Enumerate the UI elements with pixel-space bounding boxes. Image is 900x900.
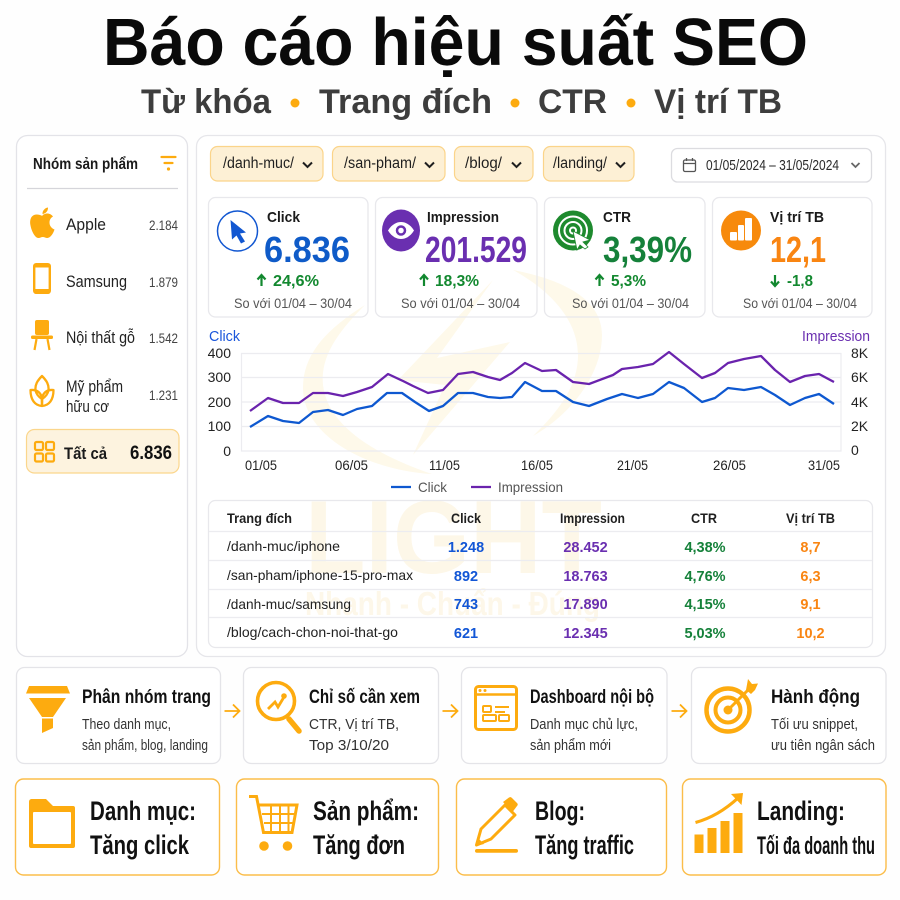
column: page: /san-pham/iphone-15-pro-max	[227, 567, 413, 583]
icon: cursor	[218, 211, 258, 251]
right axis: 4K	[851, 394, 869, 410]
item: total (highlighted): 6.836	[130, 443, 172, 464]
step card: group pages	[16, 668, 220, 764]
column: CTR: 4,15%	[684, 597, 726, 613]
goal card: blog: Blog:	[535, 796, 585, 826]
item: organic cosmetics	[30, 376, 178, 416]
table header: Impression	[560, 510, 625, 526]
column: impression: 18.763	[563, 569, 608, 585]
step card: action: ưu tiên ngân sách	[771, 738, 875, 754]
watermark: LIGHT logo	[303, 270, 602, 622]
step card: group pages: Theo danh mục,	[82, 717, 171, 733]
goal card: category: Tăng click	[90, 830, 190, 860]
right axis: 2K	[851, 418, 869, 434]
item: organic cosmetics: hữu cơ	[66, 398, 109, 416]
title: Báo cáo hiệu suất SEO	[103, 5, 808, 80]
left axis: 0	[223, 443, 231, 459]
KPI card: average position: 12,1	[770, 229, 826, 270]
column: average position: 10,2	[796, 626, 825, 642]
column: click: 621	[454, 626, 478, 642]
icon: eye	[382, 210, 420, 252]
step card: metrics to watch: Chỉ số cần xem	[309, 687, 420, 708]
item: organic cosmetics: Mỹ phẩm	[66, 378, 123, 396]
right axis	[851, 345, 869, 458]
KPI card: Impression: So với 01/04 – 30/04	[401, 296, 520, 311]
watermark: LIGHT logo: Nhanh - Chuẩn - Đúng	[305, 585, 600, 622]
icon: magnifier with trend	[258, 682, 299, 731]
column: click: 892	[454, 569, 478, 585]
goal card: product	[236, 779, 438, 875]
panel: product groups	[16, 136, 188, 656]
left axis: 200	[208, 394, 231, 410]
arrow: step 3 to 4	[672, 704, 686, 718]
item: wood furniture: 1.542	[149, 330, 178, 346]
legend: Impression	[498, 479, 563, 495]
icon: funnel	[26, 686, 70, 733]
icon: calendar	[684, 158, 696, 172]
column: click	[448, 540, 484, 642]
table header: Vị trí TB	[786, 510, 835, 526]
x axis	[245, 458, 840, 473]
goal card: blog: Tăng traffic	[535, 830, 634, 860]
column: page	[227, 538, 413, 640]
table header: Click	[451, 510, 481, 526]
subtitle: metrics: Từ khóa	[141, 83, 272, 121]
KPI card: average position: -1,8	[787, 273, 813, 290]
icon: dashboard window	[476, 686, 516, 730]
left axis: 100	[208, 418, 231, 434]
icon: pencil	[475, 797, 518, 853]
column: average position: 8,7	[800, 540, 821, 556]
column: impression: 28.452	[563, 540, 608, 556]
series: click	[250, 382, 834, 427]
left axis	[208, 345, 231, 459]
column: impression	[563, 540, 608, 642]
table header: Trang đích	[227, 510, 292, 526]
filter chips	[210, 146, 634, 181]
arrow: step 1 to 2	[224, 704, 240, 718]
step card: internal dashboard: Danh mục chủ lực,	[530, 717, 638, 733]
subtitle: metrics: Trang đích	[319, 83, 492, 121]
x axis: 21/05	[617, 458, 648, 473]
KPI card: average position	[712, 198, 872, 317]
icon: target click	[553, 210, 593, 250]
column: page: /blog/cach-chon-noi-that-go	[227, 624, 398, 640]
goal card: product: Tăng đơn	[313, 830, 405, 860]
icon: growth chart	[694, 793, 743, 853]
column: average position	[796, 540, 825, 642]
column: CTR: 4,38%	[684, 540, 726, 556]
step card: group pages: sản phẩm, blog, landing	[82, 738, 208, 754]
column: click: 1.248	[448, 540, 484, 556]
item: organic cosmetics: 1.231	[149, 387, 178, 403]
date range picker	[672, 148, 872, 182]
panel: dashboard	[196, 136, 886, 656]
table header: CTR	[691, 510, 717, 526]
step card: internal dashboard	[462, 668, 667, 764]
KPI card: Impression: 18,3%	[435, 273, 479, 290]
KPI card: Impression	[376, 198, 537, 317]
subtitle: metrics	[141, 83, 782, 121]
KPI card: average position: So với 01/04 – 30/04	[743, 296, 857, 311]
column: page: /danh-muc/samsung	[227, 596, 351, 612]
icon: filter	[162, 157, 176, 171]
x axis: 06/05	[335, 458, 368, 473]
item: total (highlighted)	[26, 430, 179, 473]
item: Samsung	[34, 264, 178, 293]
subtitle: metrics: CTR	[538, 83, 607, 121]
filter chips: /landing/	[553, 155, 608, 172]
step card: metrics to watch: Top 3/10/20	[309, 738, 389, 754]
KPI card: average position: Vị trí TB	[770, 209, 824, 226]
table: landing pages	[208, 500, 872, 648]
step card: action	[692, 668, 886, 764]
filter chips: /blog/	[465, 155, 503, 172]
chart axis title: click: Click	[209, 329, 241, 345]
right axis: 6K	[851, 369, 869, 385]
KPI card: CTR: 5,3%	[611, 273, 646, 290]
column: impression: 12.345	[563, 626, 608, 642]
icon: bars	[721, 210, 761, 250]
left axis: 400	[208, 345, 231, 361]
right axis: 8K	[851, 345, 869, 361]
column: impression: 17.890	[563, 597, 608, 613]
subtitle: metrics: Vị trí TB	[654, 83, 782, 121]
column: page: /danh-muc/iphone	[227, 538, 340, 554]
heading: product groups: Nhóm sản phẩm	[33, 155, 138, 173]
goal card: category	[16, 779, 220, 875]
x axis: 11/05	[429, 458, 460, 473]
goal card: blog	[456, 779, 666, 875]
date range picker: 01/05/2024 – 31/05/2024	[706, 158, 839, 174]
x axis: 31/05	[808, 458, 840, 473]
column: CTR: 4,76%	[684, 569, 726, 585]
KPI card: CTR: 3,39%	[603, 229, 692, 270]
icon: shopping cart	[249, 796, 297, 851]
goal card: landing	[682, 779, 886, 875]
KPI card: Click: 24,6%	[273, 273, 319, 290]
step card: metrics to watch: CTR, Vị trí TB,	[309, 717, 399, 733]
goal card: landing: Landing:	[757, 796, 845, 826]
column: CTR: 5,03%	[684, 626, 726, 642]
column: CTR	[684, 540, 726, 642]
step card: action: Hành động	[771, 687, 860, 708]
item: wood furniture: Nội thất gỗ	[66, 328, 135, 347]
chart axis title: impression: Impression	[802, 329, 870, 345]
KPI card: CTR: So với 01/04 – 30/04	[572, 296, 689, 311]
column: average position: 9,1	[800, 597, 821, 613]
column: click: 743	[454, 597, 478, 613]
x axis: 01/05	[245, 458, 277, 473]
item: Apple: 2.184	[149, 217, 178, 233]
step card: group pages: Phân nhóm trang	[82, 687, 211, 708]
KPI card: Impression: Impression	[427, 209, 499, 226]
series: impression	[250, 352, 834, 411]
goal card: product: Sản phẩm:	[313, 796, 419, 826]
step card: metrics to watch	[244, 668, 438, 764]
KPI card: CTR	[544, 198, 705, 317]
item: total (highlighted): Tất cả	[64, 444, 107, 463]
legend	[391, 479, 563, 495]
KPI card: CTR: CTR	[603, 209, 631, 226]
x axis: 16/05	[521, 458, 553, 473]
line chart: click and impression	[208, 329, 870, 495]
item: Apple: Apple	[66, 216, 106, 234]
icon: folder	[29, 799, 75, 848]
filter chips: /san-pham/	[344, 155, 417, 172]
step card: internal dashboard: Dashboard nội bộ	[530, 687, 654, 708]
legend: Click	[418, 479, 448, 495]
watermark: LIGHT logo: LIGHT	[305, 480, 602, 596]
step card: internal dashboard: sản phẩm mới	[530, 738, 611, 754]
item: wood furniture	[31, 320, 178, 350]
left axis: 300	[208, 369, 231, 385]
goal card: category: Danh mục:	[90, 796, 196, 826]
item: Samsung: Samsung	[66, 273, 127, 291]
KPI card: Click	[208, 198, 368, 317]
column: average position: 6,3	[800, 569, 821, 585]
x axis: 26/05	[713, 458, 746, 473]
arrow: step 2 to 3	[442, 704, 458, 718]
item: Apple	[30, 208, 178, 238]
KPI card: Click: 6.836	[264, 229, 350, 270]
KPI card: Click: So với 01/04 – 30/04	[234, 296, 352, 311]
KPI card: Impression: 201.529	[425, 229, 527, 270]
right axis: 0	[851, 442, 859, 458]
item: Samsung: 1.879	[149, 274, 178, 290]
step card: action: Tối ưu snippet,	[771, 717, 858, 733]
KPI card: Click: Click	[267, 209, 301, 226]
icon: target with arrow	[706, 679, 758, 732]
filter chips: /danh-muc/	[223, 155, 295, 172]
table header	[227, 510, 835, 526]
